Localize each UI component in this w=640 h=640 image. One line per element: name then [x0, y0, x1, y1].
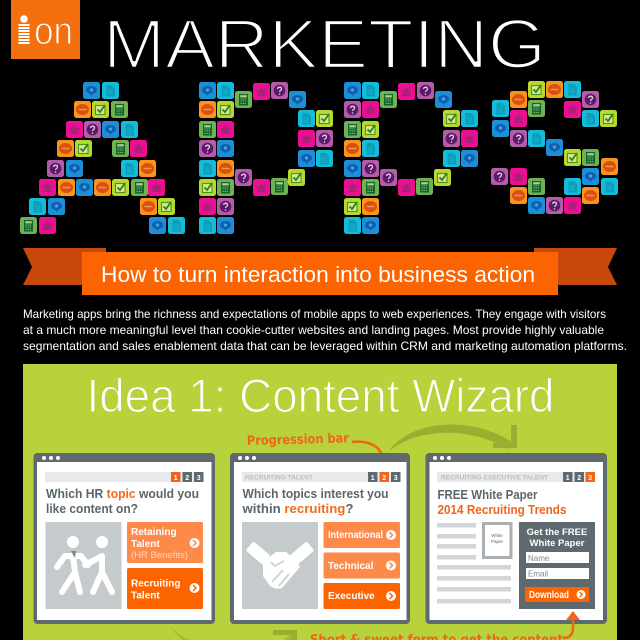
intro paragraph: segmentation and sales enablement data that can be leveraged within CRM and marketing automation platforms.	[23, 339, 627, 353]
arrow: card 2 to card 3	[388, 425, 517, 452]
text placeholder lines	[437, 523, 511, 604]
button: international	[324, 522, 400, 548]
icon letter: first P	[199, 82, 333, 234]
button: technical	[324, 552, 400, 578]
progress steps: 2	[577, 475, 581, 482]
callout: progression bar: Progression bar	[247, 431, 350, 449]
heading: Idea 1: Idea 1: Content Wizard	[86, 369, 554, 422]
button: retaining talent	[127, 522, 203, 563]
progress steps	[563, 472, 595, 482]
intro paragraph: Marketing apps bring the richness and expectations of mobile apps to web experiences. They engage with visitors	[23, 307, 606, 321]
card 2: recruiting topics: RECRUITING TALENT	[245, 476, 313, 482]
title: MARKETING: MARKETING	[103, 5, 546, 83]
button: retaining talent: (HR Benefits)	[131, 550, 188, 560]
progress steps: 1	[371, 475, 375, 482]
form panel: Download	[529, 590, 569, 601]
card 3: white paper form: RECRUITING EXECUTIVE TALENT	[441, 476, 548, 482]
card heading: Which HR topic would you	[46, 487, 199, 501]
card heading: within recruiting ?	[241, 502, 354, 516]
icon letter: S	[491, 81, 618, 214]
panel: Idea 1 content wizard	[23, 364, 617, 640]
card heading: 2014 Recruiting Trends	[438, 503, 567, 517]
card heading	[438, 488, 567, 517]
button: retaining talent: Talent	[131, 539, 160, 550]
logo: ion: i	[19, 11, 28, 52]
ribbon banner	[23, 248, 617, 295]
card heading: Which topics interest you	[242, 487, 388, 501]
progress steps: 3	[394, 475, 398, 482]
card heading: like content on?	[46, 502, 138, 516]
button: international: International	[328, 530, 383, 541]
logo: ion	[11, 0, 80, 59]
callout: progression bar	[247, 431, 390, 467]
form panel: White Paper	[530, 538, 585, 549]
icon: white paper cover: White	[491, 533, 503, 538]
card heading: FREE White Paper	[438, 488, 538, 502]
card 3: white paper form	[426, 453, 607, 624]
progress steps: 1	[174, 475, 178, 482]
icon: white paper cover	[484, 524, 511, 558]
card heading	[46, 487, 199, 516]
callout: short and sweet form	[310, 611, 580, 640]
progress steps: 3	[197, 475, 201, 482]
icon: white paper cover: Paper	[491, 539, 504, 544]
button: recruiting talent	[127, 568, 203, 609]
intro paragraph: at a much more meaningful level than cookie-cutter websites and landing pages. Most provide highly valuable	[23, 323, 604, 337]
progress steps: 3	[588, 475, 592, 482]
form panel: Name	[528, 554, 550, 563]
button: recruiting talent: Recruiting	[131, 578, 180, 590]
button: retaining talent: Retaining	[131, 527, 177, 538]
arrow: card 1 to card 2	[170, 626, 297, 640]
icon letter: second P	[344, 82, 478, 234]
progress steps: 1	[566, 475, 570, 482]
button: technical: Technical	[328, 561, 374, 572]
progress steps	[171, 472, 204, 482]
progress steps	[368, 472, 400, 482]
icon letter: A	[20, 82, 185, 234]
card 2: recruiting topics	[230, 453, 410, 624]
image: handshake	[242, 522, 318, 609]
button: executive: Executive	[328, 591, 375, 602]
image: two people shaking hands	[46, 522, 122, 609]
progress steps: 2	[382, 475, 386, 482]
form panel	[519, 522, 595, 609]
button: executive	[324, 583, 400, 609]
form panel: Email	[528, 570, 548, 578]
card heading	[241, 487, 388, 516]
ribbon banner: How to turn interaction into business action	[101, 262, 535, 287]
form panel: Get the FREE	[527, 527, 587, 538]
logo: ion: on	[34, 10, 73, 53]
button: recruiting talent: Talent	[131, 590, 160, 602]
intro paragraph	[23, 307, 627, 353]
progress steps: 2	[185, 475, 189, 482]
card 1: topic choice	[34, 453, 215, 624]
